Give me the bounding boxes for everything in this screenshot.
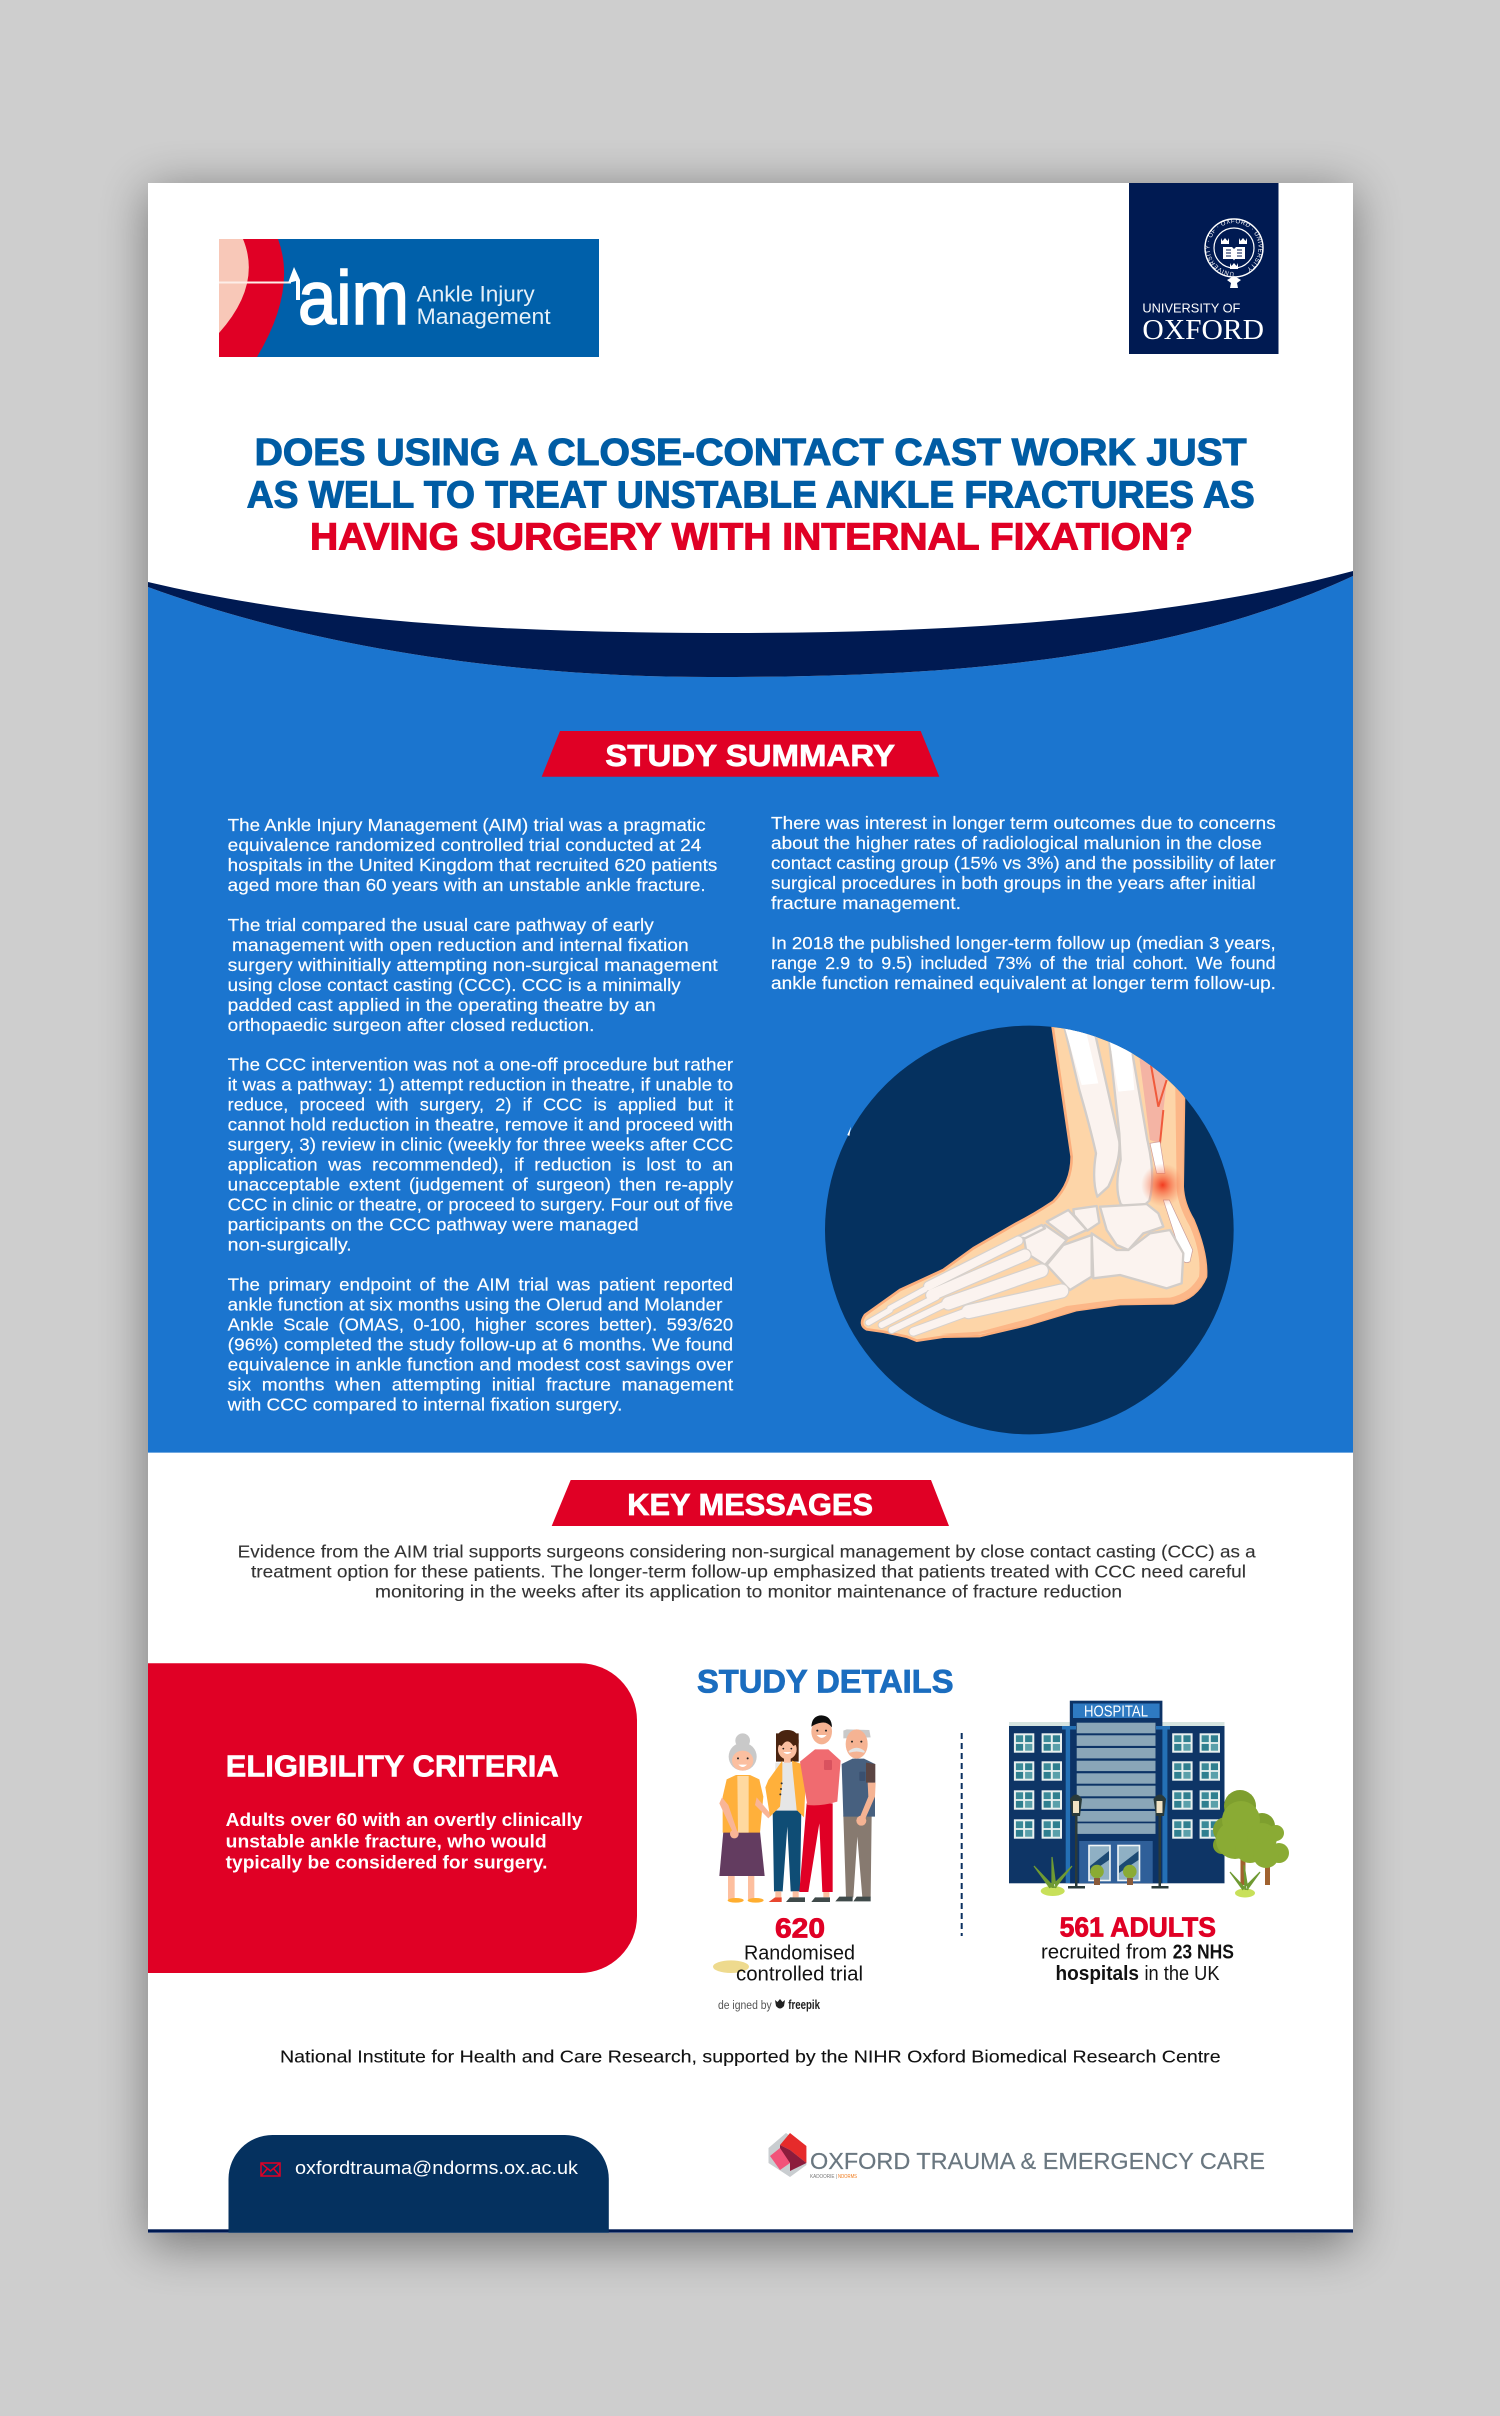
stat: 561 adults: in the UK — [1144, 1963, 1220, 1985]
text block: summary right column: surgical procedures in both groups in the years after initial — [771, 873, 1256, 893]
title: AS WELL TO TREAT UNSTABLE ANKLE FRACTURES AS — [247, 474, 1255, 516]
text block: summary left column — [227, 815, 734, 1414]
stat: 561 adults: hospitals — [1056, 1963, 1139, 1985]
text block: summary left column: non-surgically. — [228, 1234, 352, 1254]
text block: summary left column: participants on the CCC pathway were managed — [228, 1214, 639, 1234]
text block: summary left column: application was recommended), if reduction is lost to an — [228, 1154, 733, 1174]
text block: summary left column: equivalence randomized controlled trial conducted at 24 — [228, 835, 702, 855]
sign: hospital: HOSPITAL — [1084, 1704, 1148, 1721]
illustration: foot anatomy in navy circle — [825, 1020, 1234, 1434]
panel: contact email: oxfordtrauma@ndorms.ox.ac.uk — [295, 2158, 579, 2178]
stat: 561 adults — [1041, 1912, 1234, 1985]
text block: summary left column: equivalence in ankle function and modest cost savings over — [228, 1354, 733, 1374]
panel: eligibility criteria: Adults over 60 with an overtly clinically — [226, 1810, 582, 1830]
text block: summary left column: unacceptable extent (judgement of surgeon) then re-apply — [228, 1174, 733, 1194]
text block: summary left column: it was a pathway: 1) attempt reduction in theatre, if unable to — [228, 1074, 733, 1094]
text block: summary left column: padded cast applied in the operating theatre by an — [228, 995, 656, 1015]
footer line — [148, 2229, 1353, 2233]
text block: summary left column: reduce, proceed with surgery, 2) if CCC is applied but it — [228, 1094, 733, 1114]
text block: summary left column: surgery withinitially attempting non-surgical management — [228, 955, 718, 975]
text block: summary left column: six months when attempting initial fracture management — [228, 1374, 733, 1394]
text block: summary left column: management with open reduction and internal fixation — [232, 935, 689, 955]
funding note: National Institute for Health and Care Research, supported by the NIHR Oxford Biomedical Research Centre — [280, 2047, 1221, 2067]
text block: key messages: monitoring in the weeks after its application to monitor maintenance of fracture reduction — [375, 1581, 1122, 1601]
icon: Oxford seal: UNIVERSITY · OF · OXFORD · UNIVERSITY — [1206, 220, 1262, 276]
text block: summary right column: about the higher rates of radiological malunion in the close — [771, 833, 1262, 853]
metatarsals and toes — [868, 1241, 1062, 1332]
credit: designed by freepik — [718, 1998, 820, 2012]
stat: 561 adults: 23 NHS — [1173, 1941, 1234, 1963]
text block: summary right column — [771, 813, 1276, 993]
logo: AIM Ankle Injury Management: Ankle Injury — [417, 282, 535, 307]
stat: 561 adults: 561 ADULTS — [1060, 1912, 1216, 1943]
text block: summary left column: aged more than 60 years with an unstable ankle fracture. — [228, 875, 706, 895]
logo: Oxford Trauma and Emergency Care: NDORMS — [838, 2174, 858, 2180]
panel: contact email — [228, 2135, 609, 2233]
text block: summary left column: ankle function at six months using the Olerud and Molander — [228, 1294, 723, 1314]
text block: summary left column: The CCC intervention was not a one-off procedure but rather — [228, 1054, 733, 1074]
text block: summary right column: range 2.9 to 9.5) included 73% of the trial cohort. We found — [771, 953, 1276, 973]
logo: AIM Ankle Injury Management — [219, 239, 599, 357]
divider: dashed line — [961, 1733, 963, 1936]
tibia and fibula — [1063, 1020, 1152, 1209]
logo: Oxford Trauma and Emergency Care — [768, 2133, 1265, 2180]
grandmother — [719, 1733, 772, 1903]
logo: University of Oxford — [1129, 183, 1278, 354]
heading: study summary — [542, 731, 939, 777]
logo: University of Oxford: UNIVERSITY OF — [1142, 301, 1240, 316]
text block: summary left column: (96%) completed the study follow-up at 6 months. We found — [228, 1334, 733, 1354]
text block: summary left column: surgery, 3) review in clinic (weekly for three weeks after CCC — [228, 1134, 734, 1154]
text block: key messages: treatment option for these patients. The longer-term follow-up emphasized that patients treated with CCC need careful — [251, 1561, 1246, 1581]
poster — [118, 160, 1384, 2276]
title: HAVING SURGERY WITH INTERNAL FIXATION? — [310, 516, 1193, 558]
stat: 561 adults: recruited from — [1041, 1941, 1167, 1963]
credit: designed by freepik: de igned by — [718, 2000, 772, 2012]
text block: summary left column: The trial compared the usual care pathway of early — [228, 915, 654, 935]
text block: summary right column: ankle function remained equivalent at longer term follow-up. — [771, 973, 1276, 993]
text block: summary left column: CCC in clinic or theatre, or proceed to surgery. Four out of five — [228, 1194, 733, 1214]
tarsal bones — [1016, 1204, 1183, 1290]
logo: Oxford Trauma and Emergency Care: KADOORIE | — [810, 2174, 837, 2180]
text block: summary right column: There was interest in longer term outcomes due to concerns — [771, 813, 1276, 833]
stat: 620 randomised: 620 — [775, 1912, 825, 1943]
heading: key messages: KEY MESSAGES — [627, 1487, 873, 1522]
text block: summary right column: fracture management. — [771, 893, 961, 913]
young man — [786, 1715, 841, 1902]
illustration: hospital — [1009, 1701, 1289, 1898]
text block: key messages: Evidence from the AIM trial supports surgeons considering non-surgical management by close contact casting (CCC) as a — [238, 1541, 1256, 1561]
text block: summary left column: The primary endpoint of the AIM trial was patient reported — [228, 1274, 733, 1294]
panel: eligibility criteria: unstable ankle fracture, who would — [226, 1831, 547, 1851]
panel: blue study summary background with wave — [148, 571, 1353, 1453]
woman — [765, 1730, 805, 1902]
logo: AIM Ankle Injury Management: Management — [417, 304, 551, 329]
illustration: four people — [719, 1715, 876, 1903]
text block: summary left column: cannot hold reduction in theatre, remove it and proceed with — [228, 1114, 733, 1134]
logo: AIM Ankle Injury Management: aim — [298, 256, 409, 341]
logo: University of Oxford: OXFORD — [1142, 315, 1264, 346]
text block: summary left column: Ankle Scale (OMAS, 0-100, higher scores better). 593/620 — [228, 1314, 733, 1334]
stat: 620 randomised: Randomised — [744, 1942, 855, 1964]
title — [247, 432, 1255, 558]
text block: summary left column: with CCC compared to internal fixation surgery. — [227, 1394, 622, 1414]
title: DOES USING A CLOSE-CONTACT CAST WORK JUST — [255, 432, 1247, 474]
stat: 620 randomised: controlled trial — [736, 1964, 863, 1986]
text block: summary left column: hospitals in the United Kingdom that recruited 620 patients — [228, 855, 718, 875]
text block: summary left column: The Ankle Injury Management (AIM) trial was a pragmatic — [228, 815, 706, 835]
heading: key messages — [552, 1480, 949, 1526]
text block: key messages — [238, 1541, 1256, 1601]
heading: study details: STUDY DETAILS — [697, 1664, 954, 1700]
old man — [835, 1729, 876, 1901]
icon: envelope — [261, 2163, 280, 2176]
text block: summary left column: orthopaedic surgeon after closed reduction. — [228, 1015, 594, 1035]
panel: eligibility criteria: typically be considered for surgery. — [226, 1853, 547, 1873]
panel: eligibility criteria: ELIGIBILITY CRITERIA — [226, 1749, 559, 1784]
text block: summary right column: contact casting group (15% vs 3%) and the possibility of later — [771, 853, 1276, 873]
logo: Oxford Trauma and Emergency Care: OXFORD TRAUMA & EMERGENCY CARE — [810, 2148, 1265, 2174]
panel: eligibility criteria — [148, 1663, 637, 1973]
text block: summary right column: In 2018 the published longer-term follow up (median 3 years, — [771, 933, 1276, 953]
credit: designed by freepik: freepik — [788, 1998, 820, 2012]
heading: study summary: STUDY SUMMARY — [605, 738, 895, 773]
text block: summary left column: using close contact casting (CCC). CCC is a minimally — [228, 975, 681, 995]
muscle and tendon — [1139, 1058, 1166, 1142]
stat: 620 randomised — [713, 1912, 863, 1986]
